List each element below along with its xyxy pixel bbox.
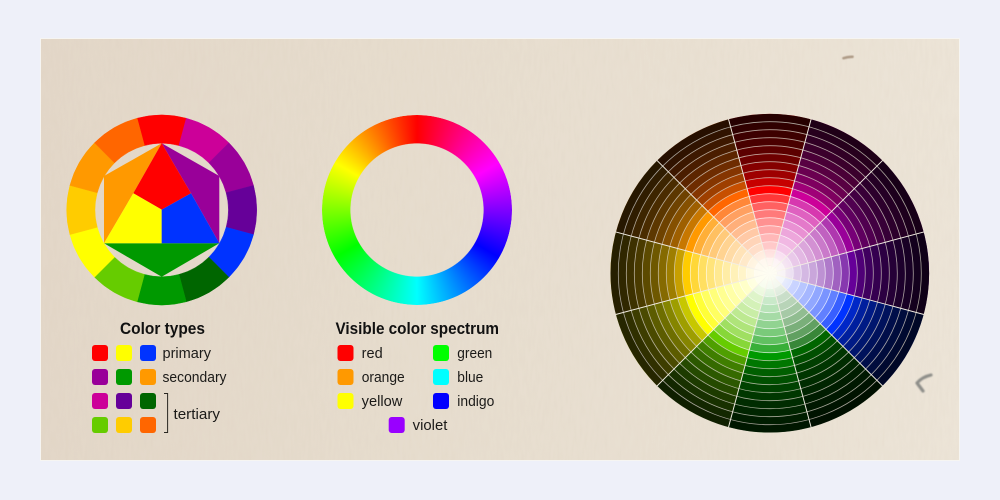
label: primary: primary xyxy=(162,346,212,362)
label: green: green xyxy=(457,346,492,362)
tint and shade color wheel xyxy=(611,114,929,432)
label: yellow: yellow xyxy=(362,394,403,410)
swatch: indigo xyxy=(433,393,449,409)
blemish: smudge top right xyxy=(844,57,852,58)
visible spectrum color ring xyxy=(322,115,512,305)
label: blue: blue xyxy=(457,370,483,386)
swatch: blue xyxy=(433,369,449,385)
label: red: red xyxy=(362,346,383,362)
swatch: yellow xyxy=(338,393,354,409)
heading: visible color spectrum: Visible color spectrum xyxy=(336,320,499,338)
label: indigo: indigo xyxy=(457,394,494,410)
paper background panel xyxy=(41,39,959,460)
swatch: red xyxy=(338,345,354,361)
secondary swatches xyxy=(92,369,156,385)
tint rings xyxy=(694,198,845,349)
twelve-part color wheel xyxy=(67,115,257,305)
outer ring separators xyxy=(618,122,921,425)
inner hexagon of primary and secondary colors xyxy=(104,143,219,277)
primary swatches xyxy=(92,345,156,361)
legend: visible color spectrum xyxy=(336,320,499,434)
label: tertiary: tertiary xyxy=(174,407,221,423)
blemish: grey tick bottom right xyxy=(917,375,931,391)
heading: color types: Color types xyxy=(120,320,205,338)
label: secondary: secondary xyxy=(162,370,227,386)
legend: color types xyxy=(92,320,227,433)
swatch: green xyxy=(433,345,449,361)
hue wedges xyxy=(611,114,929,432)
swatch: orange xyxy=(338,369,354,385)
label: violet: violet xyxy=(413,418,447,434)
wedge separators xyxy=(616,119,924,427)
label: orange: orange xyxy=(362,370,405,386)
inner ring separators xyxy=(690,194,849,353)
tertiary swatches xyxy=(92,393,156,433)
soft white centre xyxy=(744,247,796,299)
shade rings xyxy=(615,118,925,428)
swatch: violet xyxy=(389,417,405,433)
outer ring segments xyxy=(67,115,257,305)
tertiary bracket xyxy=(164,394,168,432)
